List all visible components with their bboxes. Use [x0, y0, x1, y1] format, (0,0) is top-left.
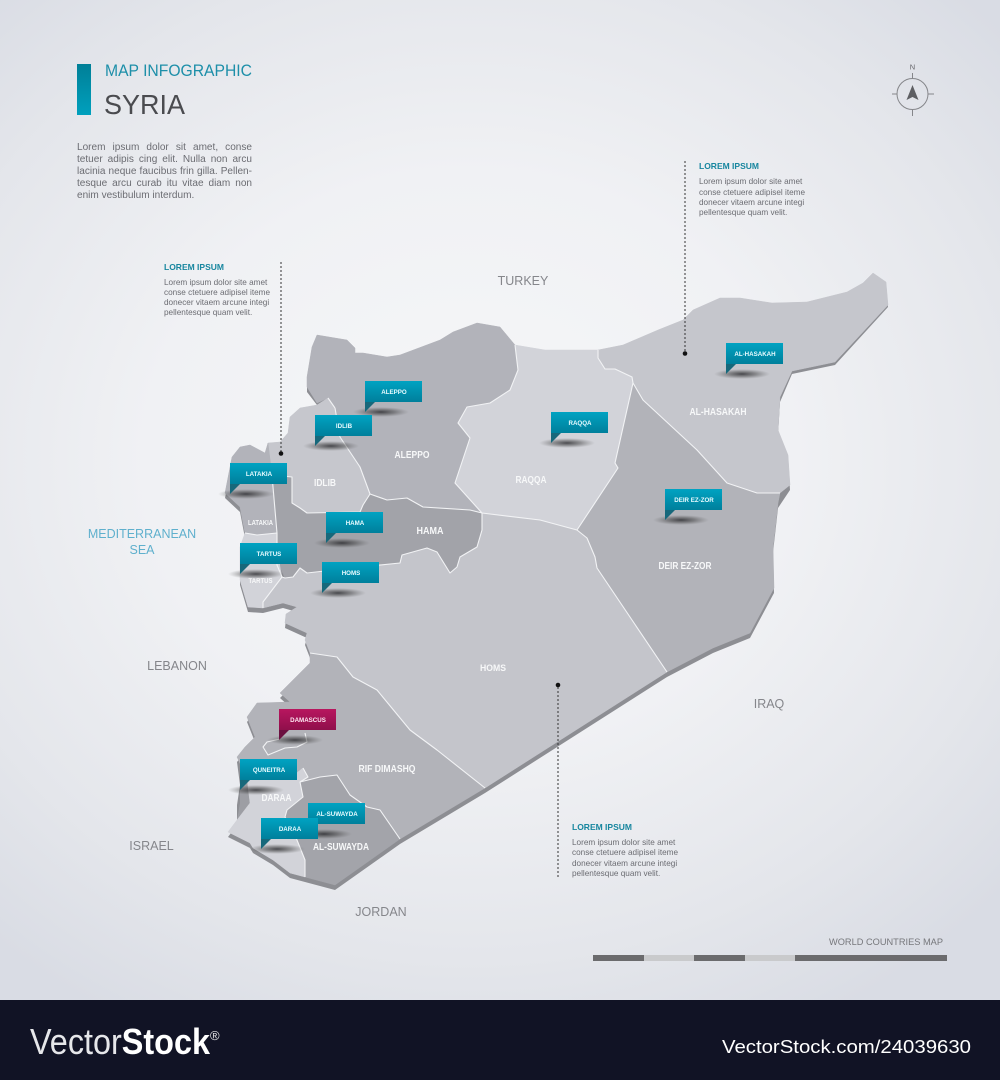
flag: Raqqa: [539, 412, 608, 448]
callout: top right: Lorem ipsum dolor site amet: [699, 177, 803, 186]
callout: top right: conse ctetuere adipisel iteme: [699, 188, 805, 197]
flag: Homs: [310, 562, 379, 598]
label: Lebanon: LEBANON: [147, 659, 207, 673]
flag: Idlib: [303, 415, 372, 451]
map extruded side: [225, 278, 888, 890]
region labels: [248, 407, 746, 853]
callout: bottom: Lorem ipsum dolor site amet: [572, 838, 676, 847]
flag: Daraa: DARAA: [279, 826, 302, 833]
intro paragraph: enim vestibulum interdum.: [77, 190, 194, 200]
flag: Latakia: [218, 463, 287, 499]
flag: Raqqa: RAQQA: [568, 420, 592, 427]
flag: Damascus: DAMASCUS: [290, 717, 326, 724]
flag: Deir Ez-Zor: DEIR EZ-ZOR: [674, 497, 714, 504]
callout: left: [164, 262, 283, 456]
label: Raqqa: RAQQA: [516, 475, 546, 486]
map of Syria: [225, 273, 888, 890]
callout: top right: donecer vitaem arcune integi: [699, 198, 804, 207]
region: Homs: [263, 513, 667, 788]
region: Tartus: [240, 533, 282, 608]
title: SYRIA: [104, 89, 185, 120]
flag: Al-Hasakah: AL-HASAKAH: [734, 351, 776, 358]
label: Homs: HOMS: [480, 663, 506, 674]
flag: Daraa: [249, 818, 318, 854]
callout: top right: [683, 161, 805, 356]
callout: bottom: conse ctetuere adipisel iteme: [572, 848, 678, 857]
label: Idlib: IDLIB: [314, 478, 336, 489]
callout: top right: pellentesque quam velit.: [699, 208, 787, 217]
flag: Quneitra: QUNEITRA: [253, 767, 286, 774]
callout: left: conse ctetuere adipisel iteme: [164, 288, 270, 297]
flag: Quneitra: [228, 759, 297, 795]
intro paragraph: [77, 142, 252, 200]
title bar accent: [77, 64, 91, 115]
region: Rif Dimashq: [237, 653, 485, 839]
scale caption: WORLD COUNTRIES MAP: [829, 937, 943, 948]
flag: Hama: [314, 512, 383, 548]
flag: Deir Ez-Zor: [653, 489, 722, 525]
callout: top right: LOREM IPSUM: [699, 161, 759, 171]
label: Jordan: JORDAN: [355, 905, 407, 919]
footer band: [0, 1000, 1000, 1080]
flag: Latakia: LATAKIA: [246, 471, 273, 478]
footer registered mark: ®: [210, 1028, 220, 1043]
icon: compass: N: [910, 62, 915, 72]
region: Latakia: [225, 443, 277, 535]
callout: bottom: [556, 683, 678, 878]
subtitle: MAP INFOGRAPHIC: [105, 62, 252, 80]
label: Al-Hasakah: AL-HASAKAH: [690, 407, 746, 418]
label: Mediterranean Sea: MEDITERRANEAN: [88, 527, 196, 541]
flag: Damascus: [267, 709, 336, 745]
callout: bottom: LOREM IPSUM: [572, 822, 632, 832]
callout: left: pellentesque quam velit.: [164, 308, 252, 317]
region: Hama: [272, 475, 482, 578]
scale bar: [593, 955, 947, 961]
intro paragraph: lacinia neque faucibus frin gilla. Pellen-: [77, 166, 252, 176]
region: Deir Ez-Zor: [577, 383, 780, 672]
flag: Al-Hasakah: [714, 343, 783, 379]
label: Mediterranean Sea: SEA: [129, 543, 155, 557]
label: Deir Ez-Zor: DEIR EZ-ZOR: [658, 561, 712, 572]
flag: Al-Suwayda: AL-SUWAYDA: [316, 811, 358, 818]
intro paragraph: tetuer adipis cing elit. Nulla non arcu: [77, 154, 252, 164]
label: Aleppo: ALEPPO: [394, 450, 430, 461]
region: Daraa: [228, 768, 308, 877]
region: Al-Suwayda: [285, 775, 400, 885]
flag: Aleppo: [353, 381, 422, 417]
callout: left: LOREM IPSUM: [164, 262, 224, 272]
country and sea labels: [88, 274, 785, 919]
flag: Hama: HAMA: [346, 520, 365, 527]
region: Al-Hasakah: [598, 273, 888, 493]
label: Tartus: TARTUS: [248, 576, 272, 585]
flag: Homs: HOMS: [342, 570, 360, 577]
label: Hama: HAMA: [416, 526, 444, 537]
icon: compass: [892, 62, 934, 116]
footer logo: VectorStock: [30, 1021, 211, 1062]
region borders: [245, 345, 780, 877]
label: Al-Suwayda: AL-SUWAYDA: [313, 842, 369, 853]
callout: left: Lorem ipsum dolor site amet: [164, 278, 268, 287]
callout: left: donecer vitaem arcune integi: [164, 298, 269, 307]
flag: Tartus: TARTUS: [257, 551, 281, 558]
label: Daraa: DARAA: [262, 793, 292, 804]
region: Raqqa: [455, 345, 633, 530]
intro paragraph: tesque arcu curab itu vitae diam non: [77, 178, 252, 188]
flag: Idlib: IDLIB: [336, 423, 353, 430]
label: Turkey: TURKEY: [498, 274, 549, 288]
flag: Tartus: [228, 543, 297, 579]
label: Latakia: LATAKIA: [248, 518, 273, 527]
footer image id: VectorStock.com/24039630: [722, 1036, 971, 1057]
label: Iraq: IRAQ: [754, 697, 785, 711]
label: Rif Dimashq: RIF DIMASHQ: [358, 764, 416, 775]
label: Israel: ISRAEL: [129, 839, 174, 853]
callout: bottom: donecer vitaem arcune integi: [572, 859, 677, 868]
region: Quneitra: [237, 778, 250, 820]
intro paragraph: Lorem ipsum dolor sit amet, conse: [77, 142, 252, 152]
callout: bottom: pellentesque quam velit.: [572, 869, 660, 878]
flag: Al-Suwayda: [296, 803, 365, 839]
flag: Aleppo: ALEPPO: [381, 389, 407, 396]
region: Idlib: [268, 398, 370, 513]
region: Aleppo: [307, 323, 518, 513]
